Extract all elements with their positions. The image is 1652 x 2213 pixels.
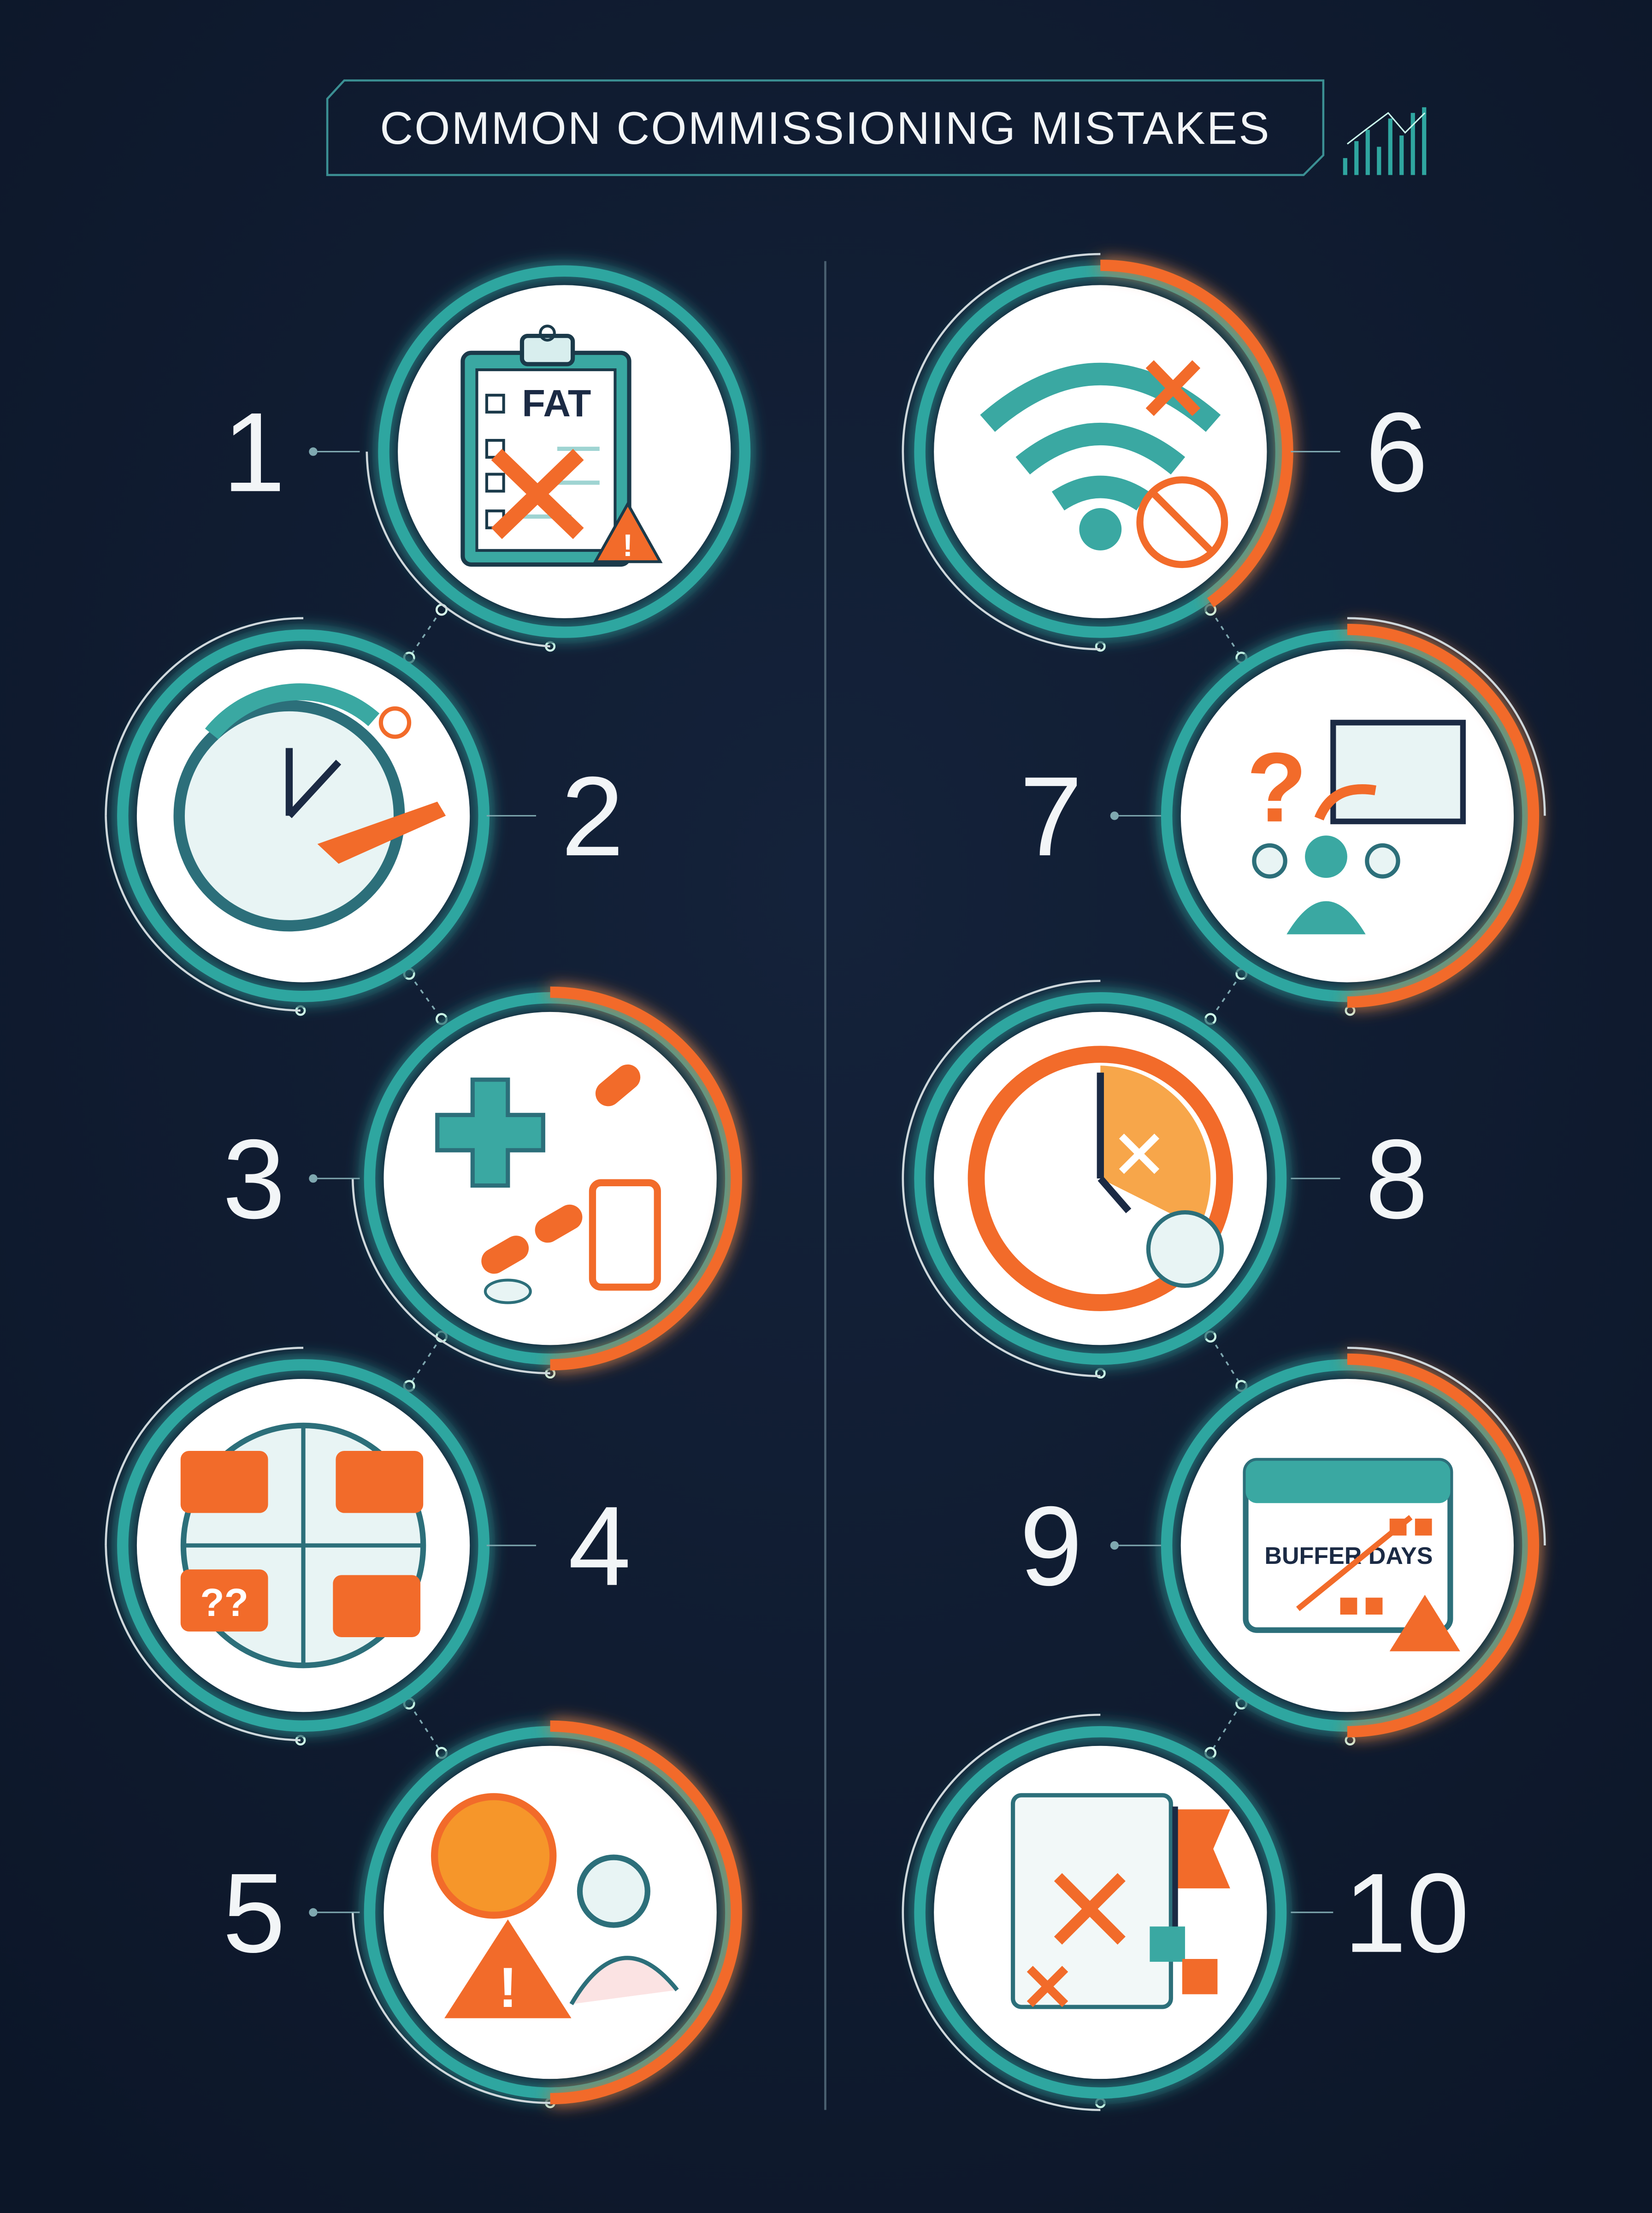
icon: globe [181,1426,423,1665]
icon: globe: ?? [200,1580,248,1625]
number 5: 5 [223,1850,285,1976]
icon: heat stress [435,1797,677,2019]
item 2 [106,618,624,1011]
item 6 [903,254,1428,649]
number 9: 9 [1020,1483,1082,1609]
title [327,80,1323,175]
number 1: 1 [223,389,285,515]
item 1 [223,260,756,646]
icon: training [1246,722,1463,935]
icon: heat stress: ! [498,1956,517,2019]
number 8: 8 [1365,1116,1428,1242]
divider [825,261,826,2110]
item 8 [903,981,1428,1376]
icon: medicine [437,1059,657,1303]
icon: clipboard FAT: ! [623,528,633,563]
number 3: 3 [223,1116,285,1242]
number 7: 7 [1020,753,1082,879]
number 10: 10 [1344,1850,1469,1976]
icon: clock plane [179,692,446,926]
icon: training: ? [1246,733,1307,843]
item 5 [223,1721,742,2104]
number 4: 4 [568,1483,631,1609]
connectors [409,609,1241,1753]
connector dots [296,605,1354,2107]
icon: 24h clock [976,1054,1225,1303]
icon: calendar buffer days [1246,1461,1460,1651]
item 7 [1020,618,1545,1008]
icon: calendar buffer days: BUFFER DAYS [1264,1543,1433,1569]
title: COMMON COMMISSIONING MISTAKES [380,103,1271,154]
icon: clipboard FAT [463,326,660,564]
icon: clipboard FAT: FAT [522,382,591,425]
number 2: 2 [561,753,624,879]
icon: wifi [987,364,1225,564]
number 6: 6 [1365,389,1428,515]
item 10 [903,1715,1469,2110]
item 9 [1020,1348,1545,1737]
item 4 [106,1348,631,1740]
icon: document flag [1013,1795,1230,2007]
icon: bar chart [1343,107,1426,175]
item 3 [223,987,742,1373]
